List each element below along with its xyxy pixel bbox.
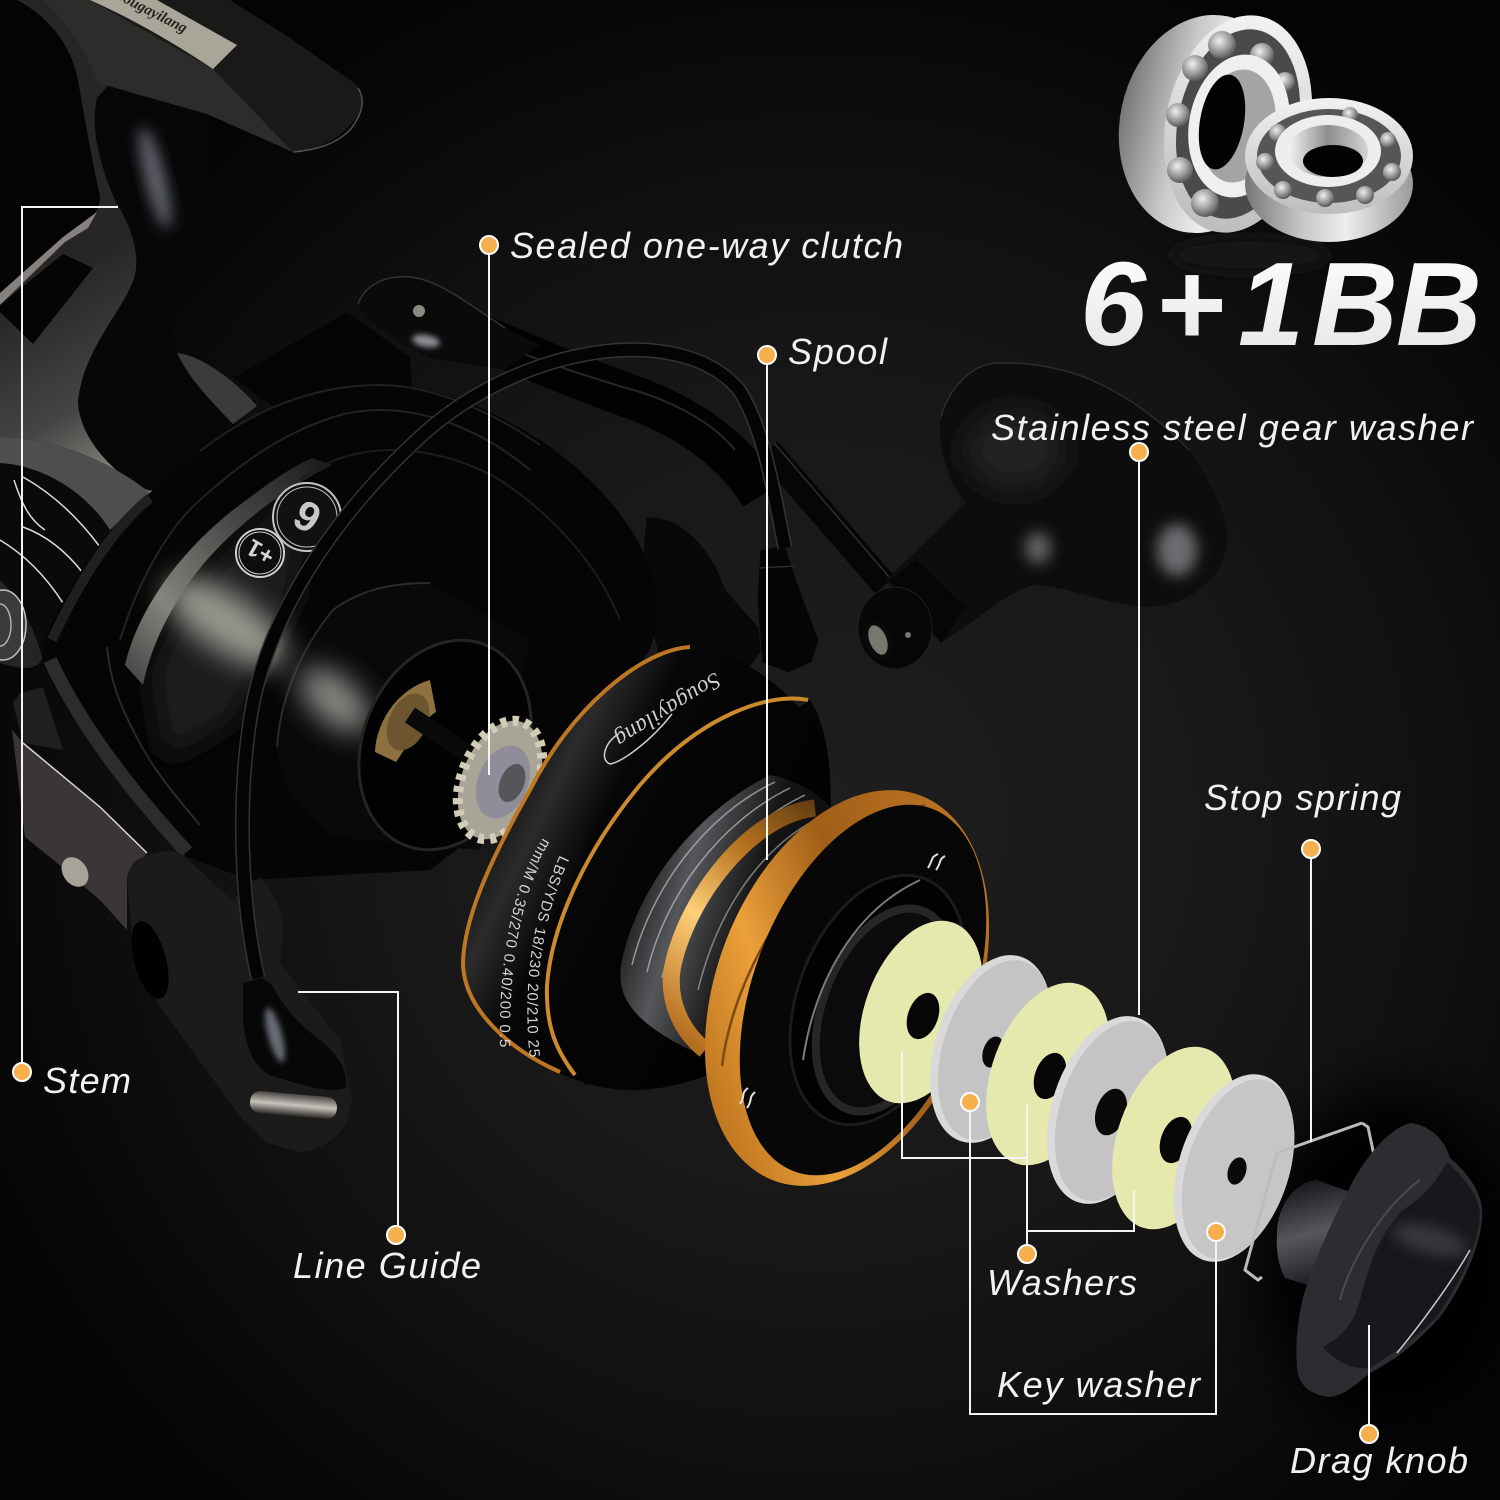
rotor cylinder [125, 458, 332, 760]
callout: drag knob [1290, 1325, 1468, 1481]
callout: spool [758, 331, 888, 860]
gold ring rear [463, 647, 690, 1072]
rotor [43, 382, 657, 880]
washers [836, 904, 1316, 1277]
line roller arm [124, 851, 352, 1152]
large bearing [1099, 0, 1331, 249]
spool specification text: LBS/YDS 18/230 20/210 25 [527, 856, 569, 1057]
small bearing [1245, 98, 1413, 242]
callout: stainless steel gear washer [991, 407, 1475, 1015]
stem slot [0, 212, 97, 344]
gold ring middle [547, 698, 808, 1075]
bearing count heading: 6+1BB [1080, 238, 1482, 371]
clutch gear [442, 708, 558, 852]
callout: sealed one-way clutch: Sealed one-way clutch [510, 225, 903, 266]
brand plate [90, 0, 237, 69]
gray washer 1 [908, 939, 1074, 1159]
shadow behind drag knob [1260, 1090, 1500, 1430]
wedge and tube [177, 277, 540, 424]
ball bearings [1099, 0, 1413, 273]
capacity badge: 6 [285, 490, 329, 543]
stop spring front leg [1245, 1123, 1362, 1280]
yellow felt washer 2 [963, 966, 1133, 1182]
line grooves [620, 775, 850, 1060]
gray washer 2 [1025, 1000, 1191, 1220]
spool shadow skirt [570, 700, 830, 1085]
callout: washers: Washers [987, 1262, 1137, 1303]
callout: stop spring: Stop spring [1204, 777, 1401, 818]
callout: line guide: Line Guide [293, 1245, 481, 1286]
callout: stainless steel gear washer: Stainless steel gear washer [991, 407, 1475, 448]
callout: spool: Spool [788, 331, 888, 372]
callout: line guide [293, 992, 481, 1286]
bearing reflection [1170, 237, 1330, 273]
rotor right lobe and bail foot [640, 517, 819, 680]
capacity badge: +1 [242, 533, 279, 570]
front flange [652, 749, 1042, 1227]
spool [461, 645, 990, 1186]
callout: key washer: Key washer [997, 1364, 1202, 1405]
callout: drag knob: Drag knob [1290, 1440, 1468, 1481]
line guide head [243, 978, 346, 1090]
black stem neck [78, 80, 300, 491]
bail arm rear bands [400, 300, 890, 585]
lower gray housing [12, 687, 147, 930]
gold band [671, 808, 815, 1050]
callout: stem: Stem [43, 1060, 131, 1101]
drag knob [1277, 1123, 1482, 1397]
callout: washers [902, 1052, 1137, 1303]
spool cylinder [463, 646, 831, 1090]
callout: sealed one-way clutch [480, 225, 903, 775]
bail wire [242, 350, 785, 978]
spool specification text: mm/M 0.35/270 0.40/200 0.5 [500, 838, 550, 1047]
left gear stack [0, 437, 150, 672]
yellow felt washer 1 [836, 904, 1006, 1120]
stop spring rear leg [1362, 1123, 1375, 1160]
gray key washer [1152, 1059, 1316, 1277]
rotor rear body [277, 450, 620, 850]
yellow felt washer 3 [1089, 1030, 1259, 1246]
callout: stem [13, 207, 131, 1101]
roller [249, 1090, 338, 1120]
callout: stop spring [1204, 777, 1401, 1142]
handle knob [858, 363, 1227, 669]
foot bar [43, 0, 362, 152]
callout: key washer [961, 1093, 1225, 1414]
reel body [0, 0, 1227, 1152]
spool logo: Sougayilang [611, 668, 726, 753]
capacity badge [236, 483, 341, 577]
stem gray casting [0, 0, 200, 493]
shaft opening [329, 614, 561, 876]
